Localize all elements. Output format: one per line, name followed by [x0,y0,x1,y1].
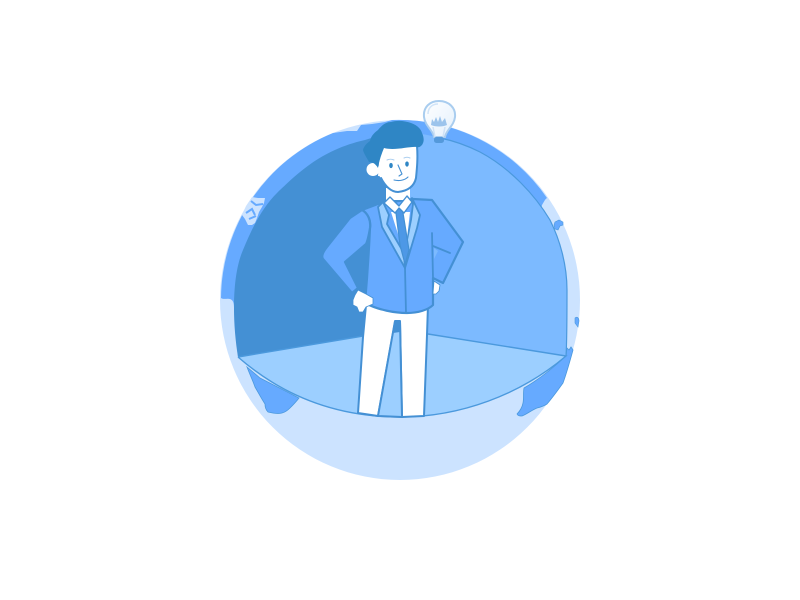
face outline [381,146,417,192]
floor [238,334,566,417]
back wall right [400,132,567,356]
island right [554,220,563,230]
globe [220,120,580,480]
man [322,121,463,417]
face [378,146,417,192]
shirt [391,212,410,256]
neck [386,188,410,200]
left hand [353,290,373,312]
hair [363,121,424,168]
lapel right [404,198,420,268]
right hand [433,281,440,294]
back wall left [234,132,400,357]
jacket [362,199,463,313]
lapel left [378,202,405,268]
floor outline [238,334,566,417]
tie [396,208,409,264]
pants [358,305,428,417]
nose and mouth [394,165,408,181]
continent upper left [242,197,265,225]
brows [387,157,410,160]
eyes [389,161,409,168]
collar [384,196,412,213]
globe upper blue land [221,120,566,357]
island far right [575,317,579,327]
wall arch outline right [440,138,567,356]
gap under right arm [434,248,438,259]
continent lower left [247,367,299,413]
ear [366,163,380,176]
continent lower right [517,347,573,416]
left sleeve [322,210,370,293]
lightbulb [424,101,455,143]
jacket seams [405,233,450,313]
